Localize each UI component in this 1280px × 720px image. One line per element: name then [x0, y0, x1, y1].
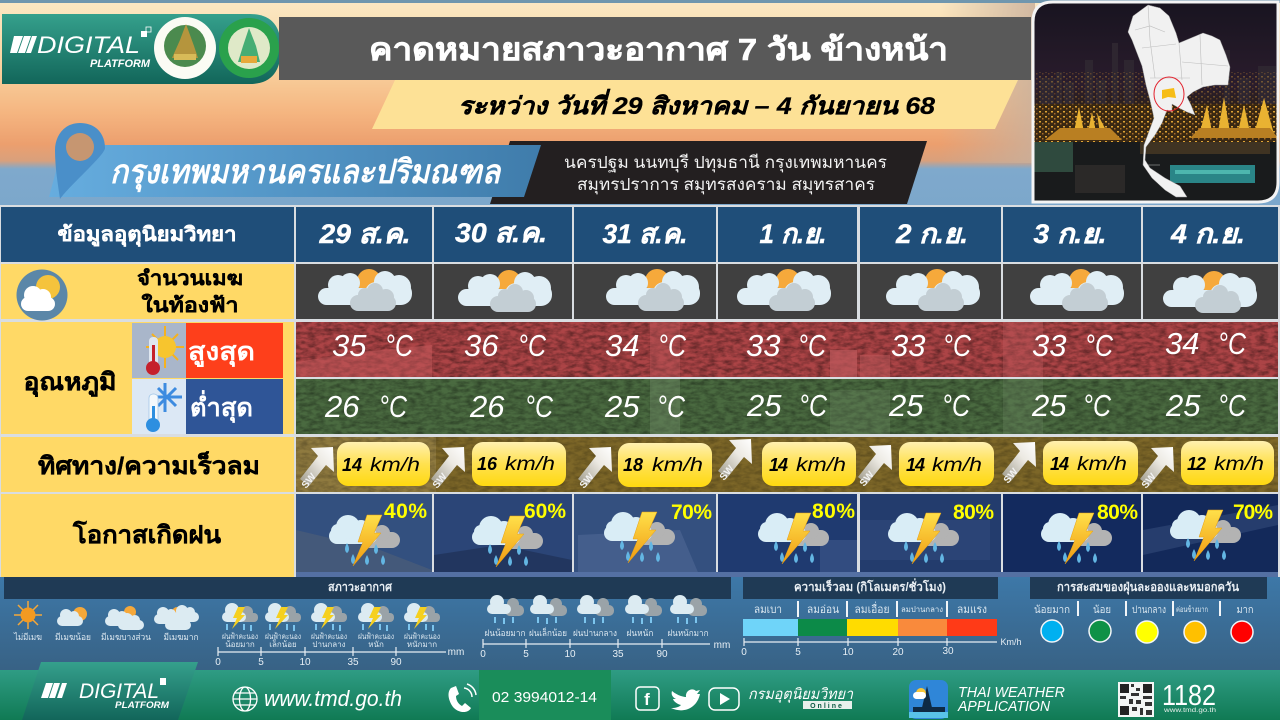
wind 3 Sep: km/h [1077, 454, 1127, 475]
icons: thunderstorm scale: 0 [215, 657, 221, 668]
icons: thunderstorm scale: ฝนฟ้าคะนอง [222, 632, 258, 641]
rain chance row: 80% [1097, 501, 1138, 524]
legend: wind speed: 10 [842, 647, 854, 658]
table: row label panel: โอกาสเกิดฝน [72, 520, 222, 549]
rain chance row: 40% [384, 500, 427, 523]
table grid background [0, 205, 1280, 577]
wind 2 Sep [858, 442, 994, 489]
maximum temperature row: 33 [891, 328, 925, 363]
title bar: คาดหมายสภาวะอากาศ 7 วัน ข้างหน้า [369, 32, 948, 67]
icons: thunderstorm scale: mm [448, 647, 464, 658]
rain chance row: 70% [671, 501, 712, 524]
legend: dust and haze: น้อย [1093, 604, 1111, 616]
wind 4 Sep: km/h [1214, 454, 1264, 475]
department online label: กรมอุตุนิยมวิทยา [748, 686, 854, 703]
wind 30 Aug [431, 442, 566, 491]
icons: thunderstorm scale: หนักมาก [407, 640, 437, 649]
region banner: กรุงเทพมหานครและปริมณฑล [110, 153, 502, 193]
footer logo: DIGITAL [79, 680, 159, 703]
app name [957, 684, 1065, 715]
emblem: ministry seal [154, 17, 216, 79]
maximum temperature row: 35 [332, 328, 367, 363]
cloud row [296, 264, 1278, 319]
wind 30 Aug: 16 [477, 454, 498, 474]
maximum temperature row: °C [1085, 328, 1113, 363]
minimum temperature row: 25 [1031, 388, 1067, 423]
icons: thunderstorm scale: หนัก [368, 640, 384, 649]
top logo panel: PLATFORM [90, 58, 151, 70]
minimum temperature row: °C [799, 388, 827, 423]
minimum temperature row: °C [1218, 388, 1246, 423]
wind 30 Aug: km/h [505, 454, 555, 475]
legend: wind speed: ความเร็วลม (กิโลเมตร/ชั่วโมง) [794, 578, 946, 594]
table: header row: 1 ก.ย. [760, 219, 826, 249]
maximum temperature row: °C [385, 328, 413, 363]
date range banner [372, 80, 1018, 129]
table: row label panel: จำนวนเมฆ [137, 268, 243, 290]
icons: rain scale [480, 595, 730, 660]
minimum temperature row: 25 [888, 388, 924, 423]
table: header row: 29 ส.ค. [318, 219, 410, 249]
minimum temperature row: °C [657, 389, 685, 424]
wind 4 Sep: SW [1140, 471, 1159, 491]
top logo panel [2, 14, 281, 84]
icons: rain scale: 0 [480, 649, 486, 660]
footer logo: PLATFORM [115, 700, 170, 710]
maximum temperature row: 34 [1165, 326, 1199, 361]
department online label: Online [810, 703, 844, 710]
wind 1 Sep: SW [718, 463, 737, 483]
icons: rain scale: mm [714, 640, 730, 651]
date range banner: ระหว่าง วันที่ 29 สิงหาคม – 4 กันยายน 68 [458, 88, 936, 120]
legend: wind speed [741, 577, 1022, 658]
legend: wind speed: Km/h [1000, 637, 1022, 647]
legend: wind speed: ลมอ่อน [807, 604, 839, 616]
wind 2 Sep: km/h [932, 455, 982, 476]
wind 1 Sep: 14 [769, 455, 788, 475]
legend: weather conditions [4, 577, 731, 668]
legend: wind speed: ลมปานกลาง [901, 605, 943, 614]
minimum temperature row: 25 [746, 388, 782, 423]
icons: thunderstorm scale: 10 [299, 657, 311, 668]
maximum temperature row: °C [943, 328, 971, 363]
icon: app [909, 680, 948, 719]
legend: wind speed: 30 [942, 646, 954, 657]
legend: dust and haze: มาก [1236, 605, 1254, 616]
wind 2 Sep: SW [858, 469, 877, 489]
table: header row: ข้อมูลอุตุนิยมวิทยา [58, 223, 236, 248]
wind 3 Sep: SW [1002, 466, 1021, 486]
table: header row: 3 ก.ย. [1034, 219, 1106, 249]
icons: rain scale: ฝนหนักมาก [668, 628, 708, 638]
icon: globe [233, 687, 257, 711]
footer bar [0, 662, 1280, 720]
icon: partly cloudy [105, 606, 144, 630]
icon: phone [449, 684, 476, 712]
region banner [49, 145, 541, 197]
icons: rain scale: 35 [612, 649, 624, 660]
icon: facebook [636, 687, 659, 710]
rain chance row: 60% [524, 500, 566, 523]
department online label [748, 686, 854, 710]
minimum temperature row: 25 [1165, 388, 1201, 423]
icons: rain scale: ฝนน้อยมาก [484, 628, 526, 638]
icons: rain scale: ฝนหนัก [626, 628, 654, 638]
website: www.tmd.go.th [264, 686, 402, 711]
rain chance row [296, 494, 1278, 577]
province list panel: นครปฐม นนทบุรี ปทุมธานี กรุงเทพมหานคร [564, 153, 887, 173]
icons: thunderstorm scale: น้อยมาก [225, 640, 255, 649]
table: header row: 4 ก.ย. [1170, 219, 1245, 249]
minimum temperature row: 26 [469, 389, 505, 424]
maximum temperature row: 36 [464, 328, 499, 363]
icons: thunderstorm scale: ฝนฟ้าคะนอง [358, 632, 394, 641]
legend: weather conditions: สภาวะอากาศ [328, 580, 392, 594]
table: row label panel: อุณหภูมิ [24, 369, 116, 398]
footer logo [22, 662, 198, 720]
table: header row: 30 ส.ค. [455, 218, 547, 248]
hotline number: www.tmd.go.th [1163, 707, 1216, 714]
minimum temperature row: 26 [324, 389, 360, 424]
icons: rain scale: 5 [523, 649, 529, 660]
temperature low label: ต่ำสุด [190, 390, 253, 424]
icons: thunderstorm scale: ฝนฟ้าคะนอง [404, 632, 440, 641]
legend: dust and haze: ค่อนข้างมาก [1176, 605, 1208, 614]
wind 31 Aug: km/h [652, 455, 703, 476]
wind 3 Sep [1002, 441, 1138, 486]
wind 4 Sep [1140, 441, 1274, 491]
icons: rain scale: 10 [564, 649, 576, 660]
photo with Thailand map [1033, 2, 1278, 202]
maximum temperature row: 34 [605, 328, 639, 363]
legend: wind speed: 0 [741, 647, 747, 658]
wind 3 Sep: 14 [1050, 454, 1069, 474]
rain chance row: 80% [953, 501, 994, 524]
maximum temperature row: 33 [746, 328, 780, 363]
icon: youtube [709, 688, 739, 710]
legend: dust and haze: น้อยมาก [1034, 604, 1070, 616]
icons: thunderstorm scale: เล็กน้อย [269, 639, 297, 649]
legend: wind speed: ลมเบา [754, 604, 782, 616]
minimum temperature row: °C [1083, 388, 1111, 423]
icons: thunderstorm scale: 90 [390, 657, 402, 668]
rain chance row: 80% [812, 500, 855, 523]
icon: cloud and sun badge [16, 270, 68, 320]
minimum temperature row: °C [525, 389, 553, 424]
minimum temperature row: °C [379, 389, 407, 424]
temperature high label [132, 323, 283, 378]
maximum temperature row: °C [798, 328, 826, 363]
emblem: meteorological department seal [219, 18, 279, 78]
table: header row [1, 207, 1278, 262]
wind 31 Aug [578, 443, 712, 491]
icon: few clouds [57, 607, 87, 626]
temperature high label: สูงสุด [188, 338, 255, 368]
legend: wind speed: 20 [892, 647, 904, 658]
icon: location pin [55, 123, 105, 199]
icons: rain scale: 90 [656, 649, 668, 660]
icons: thunderstorm scale: 35 [347, 657, 359, 668]
temperature low label [132, 379, 283, 434]
wind 1 Sep [718, 439, 856, 486]
maximum temperature row: °C [658, 328, 686, 363]
province list panel: สมุทรปราการ สมุทรสงคราม สมุทรสาคร [577, 175, 875, 195]
app name: THAI WEATHER [958, 684, 1065, 701]
legend: dust and haze [1030, 577, 1267, 643]
maximum temperature row: °C [518, 328, 546, 363]
header background [0, 0, 1280, 206]
legend: wind speed: ลมแรง [957, 604, 987, 616]
wind 4 Sep: 12 [1187, 454, 1206, 474]
legend: weather conditions: มีเมฆน้อย [55, 632, 91, 642]
wind 29 Aug: 14 [342, 455, 362, 475]
table: row label panel [1, 264, 294, 577]
icons: rain scale: ฝนเล็กน้อย [529, 626, 567, 638]
icons: rain scale: ฝนปานกลาง [573, 628, 617, 638]
province list panel [490, 141, 927, 204]
table: header row: 31 ส.ค. [602, 219, 688, 249]
legend: dust and haze: ปานกลาง [1132, 605, 1166, 616]
minimum temperature row: 25 [604, 389, 640, 424]
map of Thailand [1128, 5, 1230, 197]
phone number: 02 3994012-14 [492, 689, 597, 706]
phone number [479, 670, 611, 720]
wind 2 Sep: 14 [906, 455, 925, 475]
app name: APPLICATION [957, 698, 1050, 715]
table: row label panel: ทิศทาง/ความเร็วลม [38, 451, 260, 480]
maximum temperature row [296, 322, 1278, 377]
icons: thunderstorm scale: ฝนฟ้าคะนอง [311, 632, 347, 641]
table: row label panel: ในท้องฟ้า [142, 293, 238, 317]
legend: wind speed: 5 [795, 647, 801, 658]
wind 30 Aug: SW [431, 471, 450, 491]
rain chance row: 70% [1233, 501, 1273, 524]
minimum temperature row [296, 379, 1278, 434]
icon: twitter [671, 689, 700, 710]
wind 1 Sep: km/h [796, 455, 846, 476]
wind 31 Aug: SW [578, 471, 597, 491]
wind row [296, 437, 1278, 492]
top logo panel: DIGITAL [37, 32, 140, 59]
icons: thunderstorm scale [215, 603, 464, 668]
legend: weather conditions: มีเมฆมาก [164, 632, 198, 642]
icon: mostly cloudy [154, 605, 199, 630]
legend: dust and haze: การสะสมของฝุ่นละอองและหมอกควัน [1057, 580, 1240, 595]
wind 29 Aug: SW [300, 471, 319, 491]
icon: facebook: f [644, 690, 650, 709]
wind 29 Aug [300, 442, 430, 491]
wind 31 Aug: 18 [623, 455, 643, 475]
legend: wind speed: ลมเอื่อย [854, 601, 890, 616]
title bar [279, 17, 1031, 80]
QR code [1118, 682, 1154, 717]
legend: weather conditions: มีเมฆบางส่วน [101, 632, 151, 642]
legend: weather conditions: ไม่มีเมฆ [13, 632, 42, 642]
icon: clear sky [14, 601, 42, 629]
icons: thunderstorm scale: 5 [258, 657, 264, 668]
table: header row: 2 ก.ย. [895, 219, 968, 249]
icons: thunderstorm scale: ปานกลาง [312, 640, 346, 649]
minimum temperature row: °C [942, 388, 970, 423]
maximum temperature row: °C [1218, 326, 1246, 361]
wind 29 Aug: km/h [370, 455, 420, 476]
maximum temperature row: 33 [1032, 328, 1066, 363]
hotline number: 1182 [1162, 680, 1216, 712]
legend background [0, 577, 1280, 670]
icons: thunderstorm scale: ฝนฟ้าคะนอง [265, 632, 301, 641]
